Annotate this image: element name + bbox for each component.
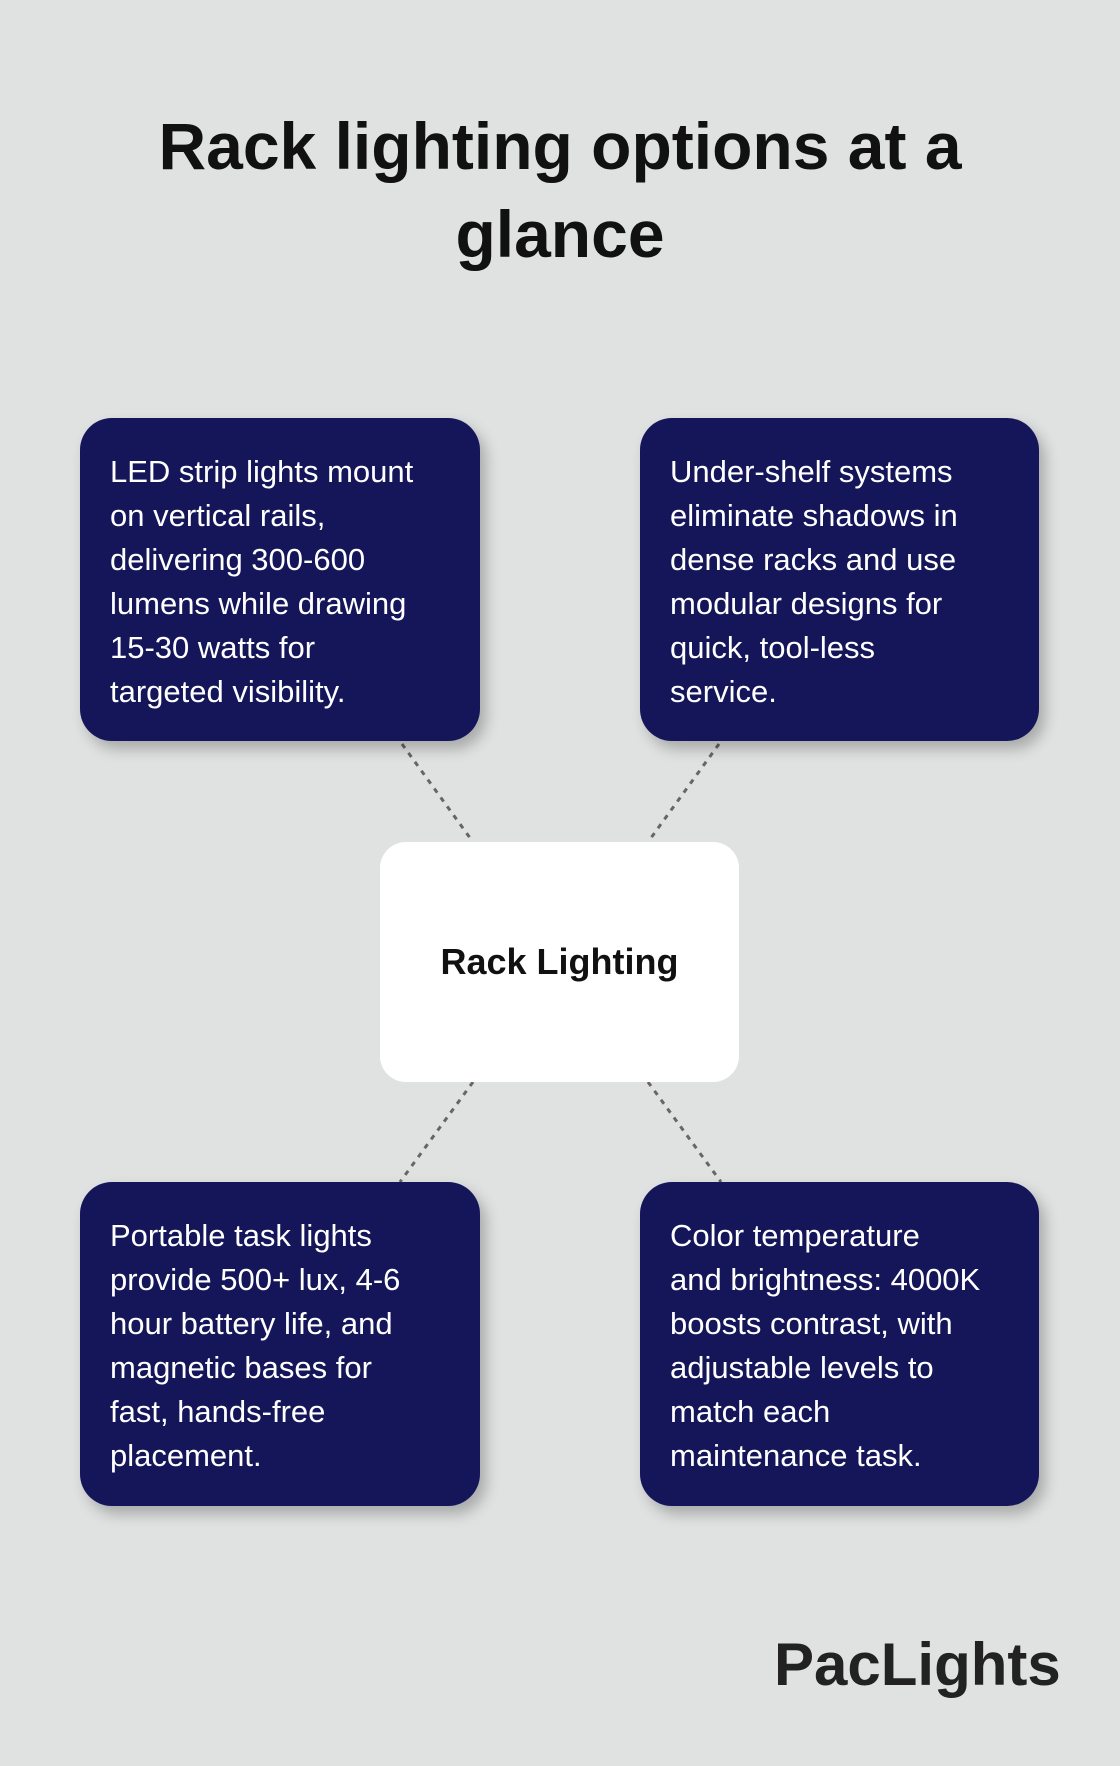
logo: PacLights xyxy=(774,1631,1061,1698)
panel: color temperature: match each xyxy=(670,1394,830,1429)
panel: color temperature: and brightness: 4000K xyxy=(670,1262,980,1297)
panel: LED strip lights: 15-30 watts for xyxy=(110,630,315,665)
panel: LED strip lights: delivering 300-600 xyxy=(110,542,365,577)
panel: under-shelf systems xyxy=(640,418,1039,741)
panel: under-shelf systems: dense racks and use xyxy=(670,542,956,577)
panel: color temperature: adjustable levels to xyxy=(670,1350,934,1385)
panel: under-shelf systems: eliminate shadows in xyxy=(670,498,958,533)
panel: LED strip lights: on vertical rails, xyxy=(110,498,325,533)
panel: color temperature: boosts contrast, with xyxy=(670,1306,953,1341)
panel: portable task lights: hour battery life, and xyxy=(110,1306,393,1341)
panel: portable task lights: fast, hands-free xyxy=(110,1394,325,1429)
panel: LED strip lights: targeted visibility. xyxy=(110,674,345,709)
center node xyxy=(380,842,739,1082)
panel: under-shelf systems: service. xyxy=(670,674,777,709)
panel: under-shelf systems: modular designs for xyxy=(670,586,942,621)
panel: color temperature xyxy=(640,1182,1039,1506)
panel: color temperature: Color temperature xyxy=(670,1218,920,1253)
title: glance xyxy=(455,197,665,271)
panel: color temperature: maintenance task. xyxy=(670,1438,922,1473)
panel: LED strip lights xyxy=(80,418,480,741)
panel: portable task lights: Portable task lights xyxy=(110,1218,372,1253)
panel: LED strip lights: lumens while drawing xyxy=(110,586,406,621)
panel: portable task lights: placement. xyxy=(110,1438,262,1473)
panel: under-shelf systems: Under-shelf systems xyxy=(670,454,953,489)
panel: LED strip lights: LED strip lights mount xyxy=(110,454,413,489)
panel: portable task lights xyxy=(80,1182,480,1506)
center node: Rack Lighting xyxy=(440,941,678,982)
title xyxy=(158,109,962,271)
title: Rack lighting options at a xyxy=(158,109,962,183)
panel: portable task lights: provide 500+ lux, 4-6 xyxy=(110,1262,400,1297)
panel: under-shelf systems: quick, tool-less xyxy=(670,630,875,665)
panel: portable task lights: magnetic bases for xyxy=(110,1350,372,1385)
